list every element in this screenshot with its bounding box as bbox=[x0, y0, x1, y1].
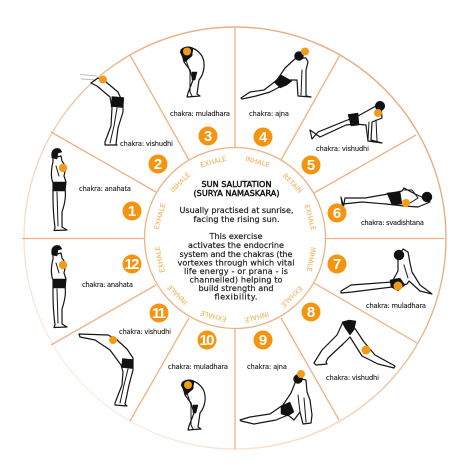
wheel: outer circle and spokes bbox=[22, 27, 446, 449]
breathing labels ring: RETAIN bbox=[281, 172, 304, 195]
breathing labels ring: EXHALE bbox=[153, 245, 167, 273]
number badges bbox=[122, 126, 346, 350]
breathing labels ring: EXHALE bbox=[200, 155, 227, 169]
number badges: 12 bbox=[124, 256, 140, 273]
pose 9: low lunge bbox=[240, 370, 312, 424]
centre description: Usually practised at sunrise, bbox=[180, 205, 294, 215]
pose 3: forward bend bbox=[180, 47, 204, 97]
breathing labels ring: INHALE bbox=[166, 283, 189, 306]
number badges: 6 bbox=[333, 205, 341, 222]
chakra labels: chakra: vishudhi bbox=[120, 140, 173, 148]
chakra labels bbox=[79, 110, 426, 382]
breathing labels ring: INHALE bbox=[243, 310, 270, 324]
centre heading: SUN SALUTATION bbox=[202, 179, 272, 189]
number badges: 4 bbox=[259, 129, 268, 146]
breathing labels ring: EXHALE bbox=[200, 309, 227, 323]
breathing labels ring bbox=[153, 155, 317, 324]
number badges: 9 bbox=[259, 332, 267, 349]
pose 12: standing prayer bbox=[52, 245, 67, 328]
chakra labels: chakra: anahata bbox=[82, 281, 133, 289]
centre description: activates the endocrine bbox=[188, 240, 284, 250]
chakra labels: chakra: muladhara bbox=[170, 110, 230, 118]
chakra labels: chakra: ajna bbox=[247, 363, 287, 371]
breathing labels ring: INHALE bbox=[169, 171, 192, 194]
chakra labels: chakra: muladhara bbox=[366, 302, 426, 310]
chakra labels: chakra: vishudhi bbox=[316, 145, 369, 153]
chakra labels: chakra: svadishtana bbox=[361, 219, 424, 227]
pose 11: standing back bend bbox=[79, 334, 133, 406]
centre heading: (SURYA NAMASKARA) bbox=[194, 188, 280, 198]
number badges: 11 bbox=[152, 305, 166, 322]
centre heading bbox=[194, 179, 280, 198]
centre description bbox=[178, 205, 294, 302]
pose 2: standing back bend bbox=[80, 74, 124, 145]
centre description: facing the rising sun. bbox=[194, 214, 280, 224]
chakra labels: chakra: ajna bbox=[249, 110, 289, 118]
number badges: 10 bbox=[200, 332, 214, 349]
pose 6: prone bbox=[341, 188, 432, 209]
chakra labels: chakra: muladhara bbox=[168, 363, 228, 371]
pose 10: forward bend bbox=[181, 380, 205, 430]
breathing labels ring: EXHALE bbox=[153, 203, 167, 230]
centre description: build strength and bbox=[198, 283, 274, 293]
breathing labels ring: EXHALE bbox=[279, 284, 304, 309]
number badges: 3 bbox=[204, 128, 212, 145]
breathing labels ring: INHALE bbox=[305, 246, 317, 272]
number badges: 8 bbox=[307, 304, 315, 321]
pose 4: lunge bbox=[241, 48, 311, 99]
centre description: system and the chakras (the bbox=[180, 249, 293, 259]
centre description: flexibility. bbox=[214, 292, 258, 302]
chakra labels: chakra: anahata bbox=[79, 185, 131, 193]
centre description: This exercise bbox=[208, 231, 263, 241]
pose 7: cobra bbox=[341, 249, 432, 294]
chakra labels: chakra: vishudhi bbox=[119, 328, 171, 336]
pose 8: downward dog bbox=[314, 320, 395, 368]
pose 1: standing prayer bbox=[52, 148, 67, 230]
centre description: channelled) helping to bbox=[190, 274, 283, 284]
number badges: 2 bbox=[154, 156, 162, 173]
number badges: 1 bbox=[128, 203, 136, 220]
centre description: life energy - or prana - is bbox=[184, 266, 288, 276]
pose 5: plank bbox=[310, 101, 385, 143]
centre description: vortexes through which vital bbox=[178, 258, 294, 268]
number badges: 5 bbox=[307, 157, 315, 174]
chakra labels: chakra: vishudhi bbox=[326, 374, 379, 382]
breathing labels ring: INHALE bbox=[244, 155, 271, 169]
number badges: 7 bbox=[333, 256, 341, 273]
breathing labels ring: EXHALE bbox=[303, 204, 317, 231]
